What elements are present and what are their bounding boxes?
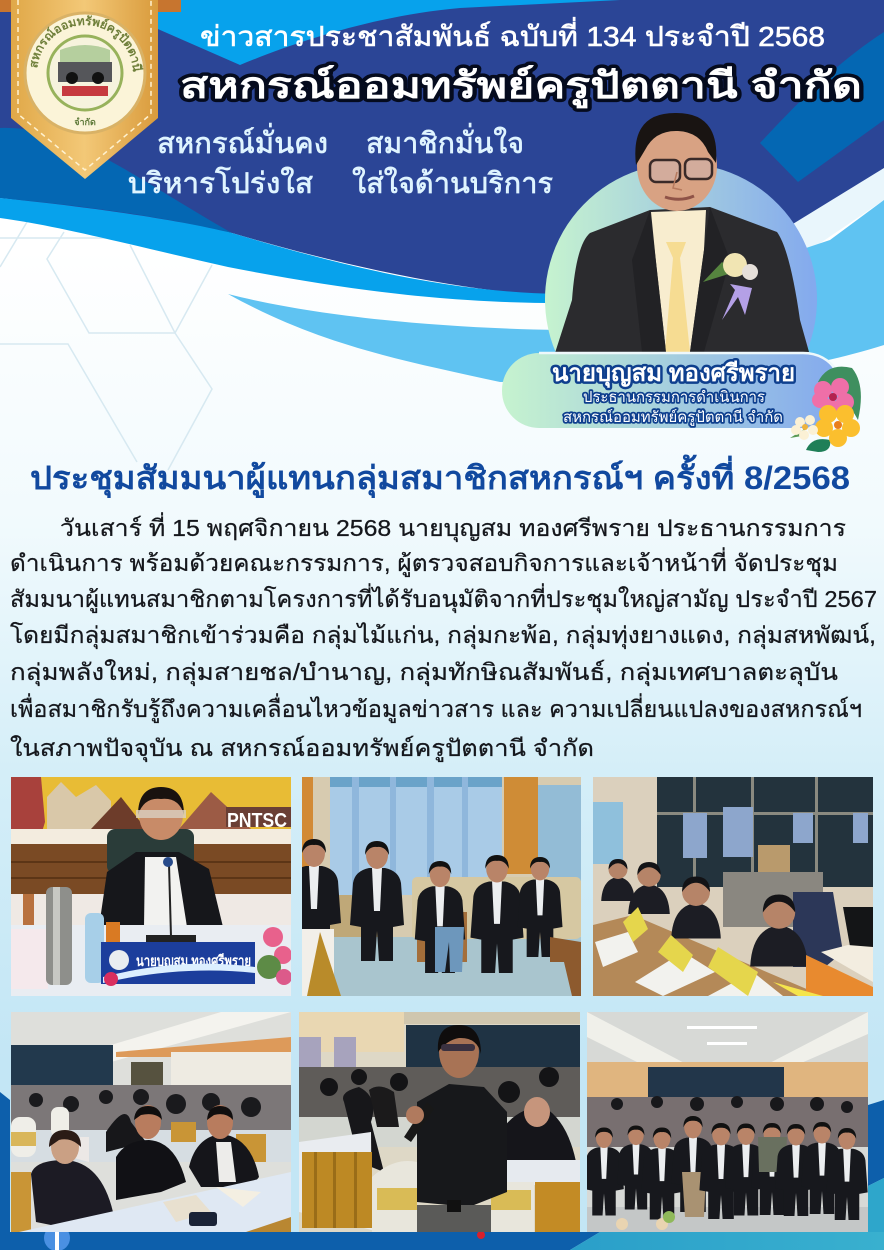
- photo 1: chairman at desk: นายบุญสม ทองศรีพราย: [136, 953, 251, 971]
- header: right white band: [770, 168, 884, 250]
- body paragraph: [10, 512, 877, 762]
- slogans: บริหารโปร่งใส: [128, 166, 313, 200]
- portrait: chairman: [555, 113, 809, 353]
- photo 5: speaker with microphone: [299, 1012, 580, 1232]
- photo 2: seated delegates: [302, 777, 581, 996]
- footer: heart icon: [477, 1231, 485, 1239]
- photo 1: chairman at desk: [11, 777, 291, 996]
- header: bright blue wave edge: [0, 198, 560, 303]
- name plate: สหกรณ์ออมทรัพย์ครูปัตตานี จำกัด: [563, 409, 783, 426]
- slogans: สหกรณ์มั่นคง: [157, 123, 328, 160]
- body paragraph: วันเสาร์ ที่ 15 พฤศจิกายน 2568 นายบุญสม ทองศรีพราย ประธานกรรมการ: [60, 512, 846, 542]
- header line: newsletter issue: ข่าวสารประชาสัมพันธ์ ฉบับที่ 134 ประจำปี 2568: [200, 17, 825, 52]
- icon: tropical flowers: [790, 367, 861, 452]
- name plate: [502, 353, 840, 428]
- logo seal: จำกัด: [74, 117, 96, 127]
- header: upper cyan swoosh: [110, 0, 620, 65]
- body paragraph: กลุ่มพลังใหม่, กลุ่มสายชล/บำนาญ, กลุ่มทักษิณสัมพันธ์, กลุ่มเทศบาลตะลุบัน: [10, 659, 838, 686]
- header: navy wave: [0, 0, 884, 296]
- body paragraph: สัมมนาผู้แทนสมาชิกตามโครงการที่ได้รับอนุมัติจากที่ประชุมใหญ่สามัญ ประจำปี 2567: [10, 583, 877, 613]
- slogans: [128, 123, 553, 200]
- footer: facebook icon: [44, 1225, 70, 1250]
- body paragraph: ในสภาพปัจจุบัน ณ สหกรณ์ออมทรัพย์ครูปัตตานี จำกัด: [10, 735, 594, 762]
- photo 6: group portrait: [587, 1012, 868, 1232]
- header: light-blue wave: [228, 200, 884, 382]
- logo badge: [0, 0, 181, 179]
- photo 4: audience at tables: [11, 1012, 291, 1232]
- body paragraph: ดำเนินการ พร้อมด้วยคณะกรรมการ, ผู้ตรวจสอบกิจการและเจ้าหน้าที่ จัดประชุม: [10, 547, 838, 577]
- header: top-right dark swoosh: [760, 32, 884, 182]
- logo seal: สหกรณ์ออมทรัพย์ครูปัตตานี: [30, 15, 144, 72]
- logo seal: [24, 12, 146, 134]
- footer: side and bottom bands: [0, 1092, 884, 1250]
- name plate: ประธานกรรมการดำเนินการ: [583, 389, 765, 406]
- body paragraph: เพื่อสมาชิกรับรู้ถึงความเคลื่อนไหวข้อมูลข่าวสาร และ ความเปลี่ยนแปลงของสหกรณ์ฯ: [10, 693, 862, 723]
- name plate: นายบุญสม ทองศรีพราย: [552, 360, 795, 389]
- title: cooperative name: สหกรณ์ออมทรัพย์ครูปัตตานี จำกัด: [180, 65, 862, 109]
- slogans: สมาชิกมั่นใจ: [366, 123, 524, 160]
- body paragraph: โดยมีกลุ่มสมาชิกเข้าร่วมคือ กลุ่มไม้แก่น, กลุ่มกะพ้อ, กลุ่มทุ่งยางแดง, กลุ่มสหพัฒน์,: [10, 622, 876, 649]
- photo 3: women at table: [593, 777, 873, 996]
- header: left dark swoosh: [0, 128, 232, 233]
- heading: ประชุมสัมมนาผู้แทนกลุ่มสมาชิกสหกรณ์ฯ ครั้งที่ 8/2568: [30, 454, 850, 499]
- slogans: ใส่ใจด้านบริการ: [352, 166, 553, 200]
- icon: corsage: [703, 253, 758, 320]
- portrait: gradient circle: [545, 163, 817, 353]
- hexagon background pattern: [0, 222, 212, 470]
